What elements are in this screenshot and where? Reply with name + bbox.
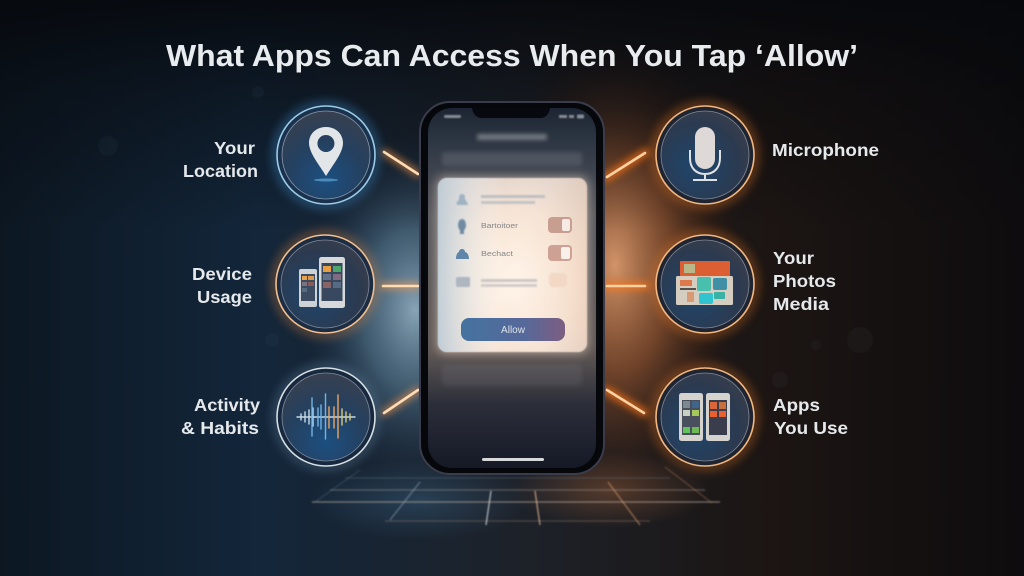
- phone body: [420, 102, 604, 474]
- icon: microphone: [690, 127, 720, 180]
- icon: two phones: [299, 257, 345, 308]
- title: What Apps Can Access When You Tap ‘Allow’: [166, 38, 858, 73]
- label: Your: [773, 248, 814, 268]
- notch: [472, 108, 550, 118]
- icon: photo folder: [676, 261, 733, 305]
- label: Location: [183, 161, 258, 181]
- row 2: Bartoitoer: [481, 223, 519, 230]
- allow button: [461, 318, 565, 341]
- phone: [420, 102, 604, 474]
- phone screen: [428, 108, 596, 468]
- connector lines: right: [606, 152, 646, 413]
- connector lines: left: [383, 152, 418, 413]
- status bar: [444, 114, 584, 118]
- label: & Habits: [181, 418, 259, 438]
- label: Apps: [773, 395, 820, 415]
- item: your location: [183, 105, 376, 205]
- icon: sound wave: [297, 394, 355, 439]
- item: apps you use: [655, 367, 848, 467]
- item: your photos media: [655, 234, 836, 334]
- home indicator: [482, 458, 544, 461]
- label: [183, 138, 258, 181]
- icon: location pin: [309, 127, 343, 182]
- label: Activity: [194, 395, 260, 415]
- label: [773, 248, 836, 314]
- permission dialog: [436, 176, 589, 354]
- label: Device: [192, 264, 252, 284]
- row 2: [458, 217, 572, 234]
- item: device usage: [192, 234, 375, 334]
- label: [192, 264, 252, 307]
- item: microphone: [655, 105, 879, 205]
- row 3: [456, 245, 572, 261]
- label: Your: [214, 138, 255, 158]
- row 1: [456, 194, 545, 205]
- label: Usage: [197, 287, 252, 307]
- label: Photos: [773, 271, 836, 291]
- label: Microphone: [772, 140, 879, 160]
- label: [773, 395, 848, 438]
- label: [181, 395, 260, 438]
- label: You Use: [774, 418, 848, 438]
- blurred app heading: [442, 134, 582, 386]
- label: Media: [773, 294, 829, 314]
- row 3: Bechact: [481, 251, 513, 258]
- glow ring: [276, 105, 376, 205]
- floor grid: [312, 467, 720, 525]
- icon: app phones: [679, 393, 730, 441]
- row 4: [456, 273, 567, 287]
- allow button: Allow: [501, 325, 526, 336]
- item: activity and habits: [181, 367, 376, 467]
